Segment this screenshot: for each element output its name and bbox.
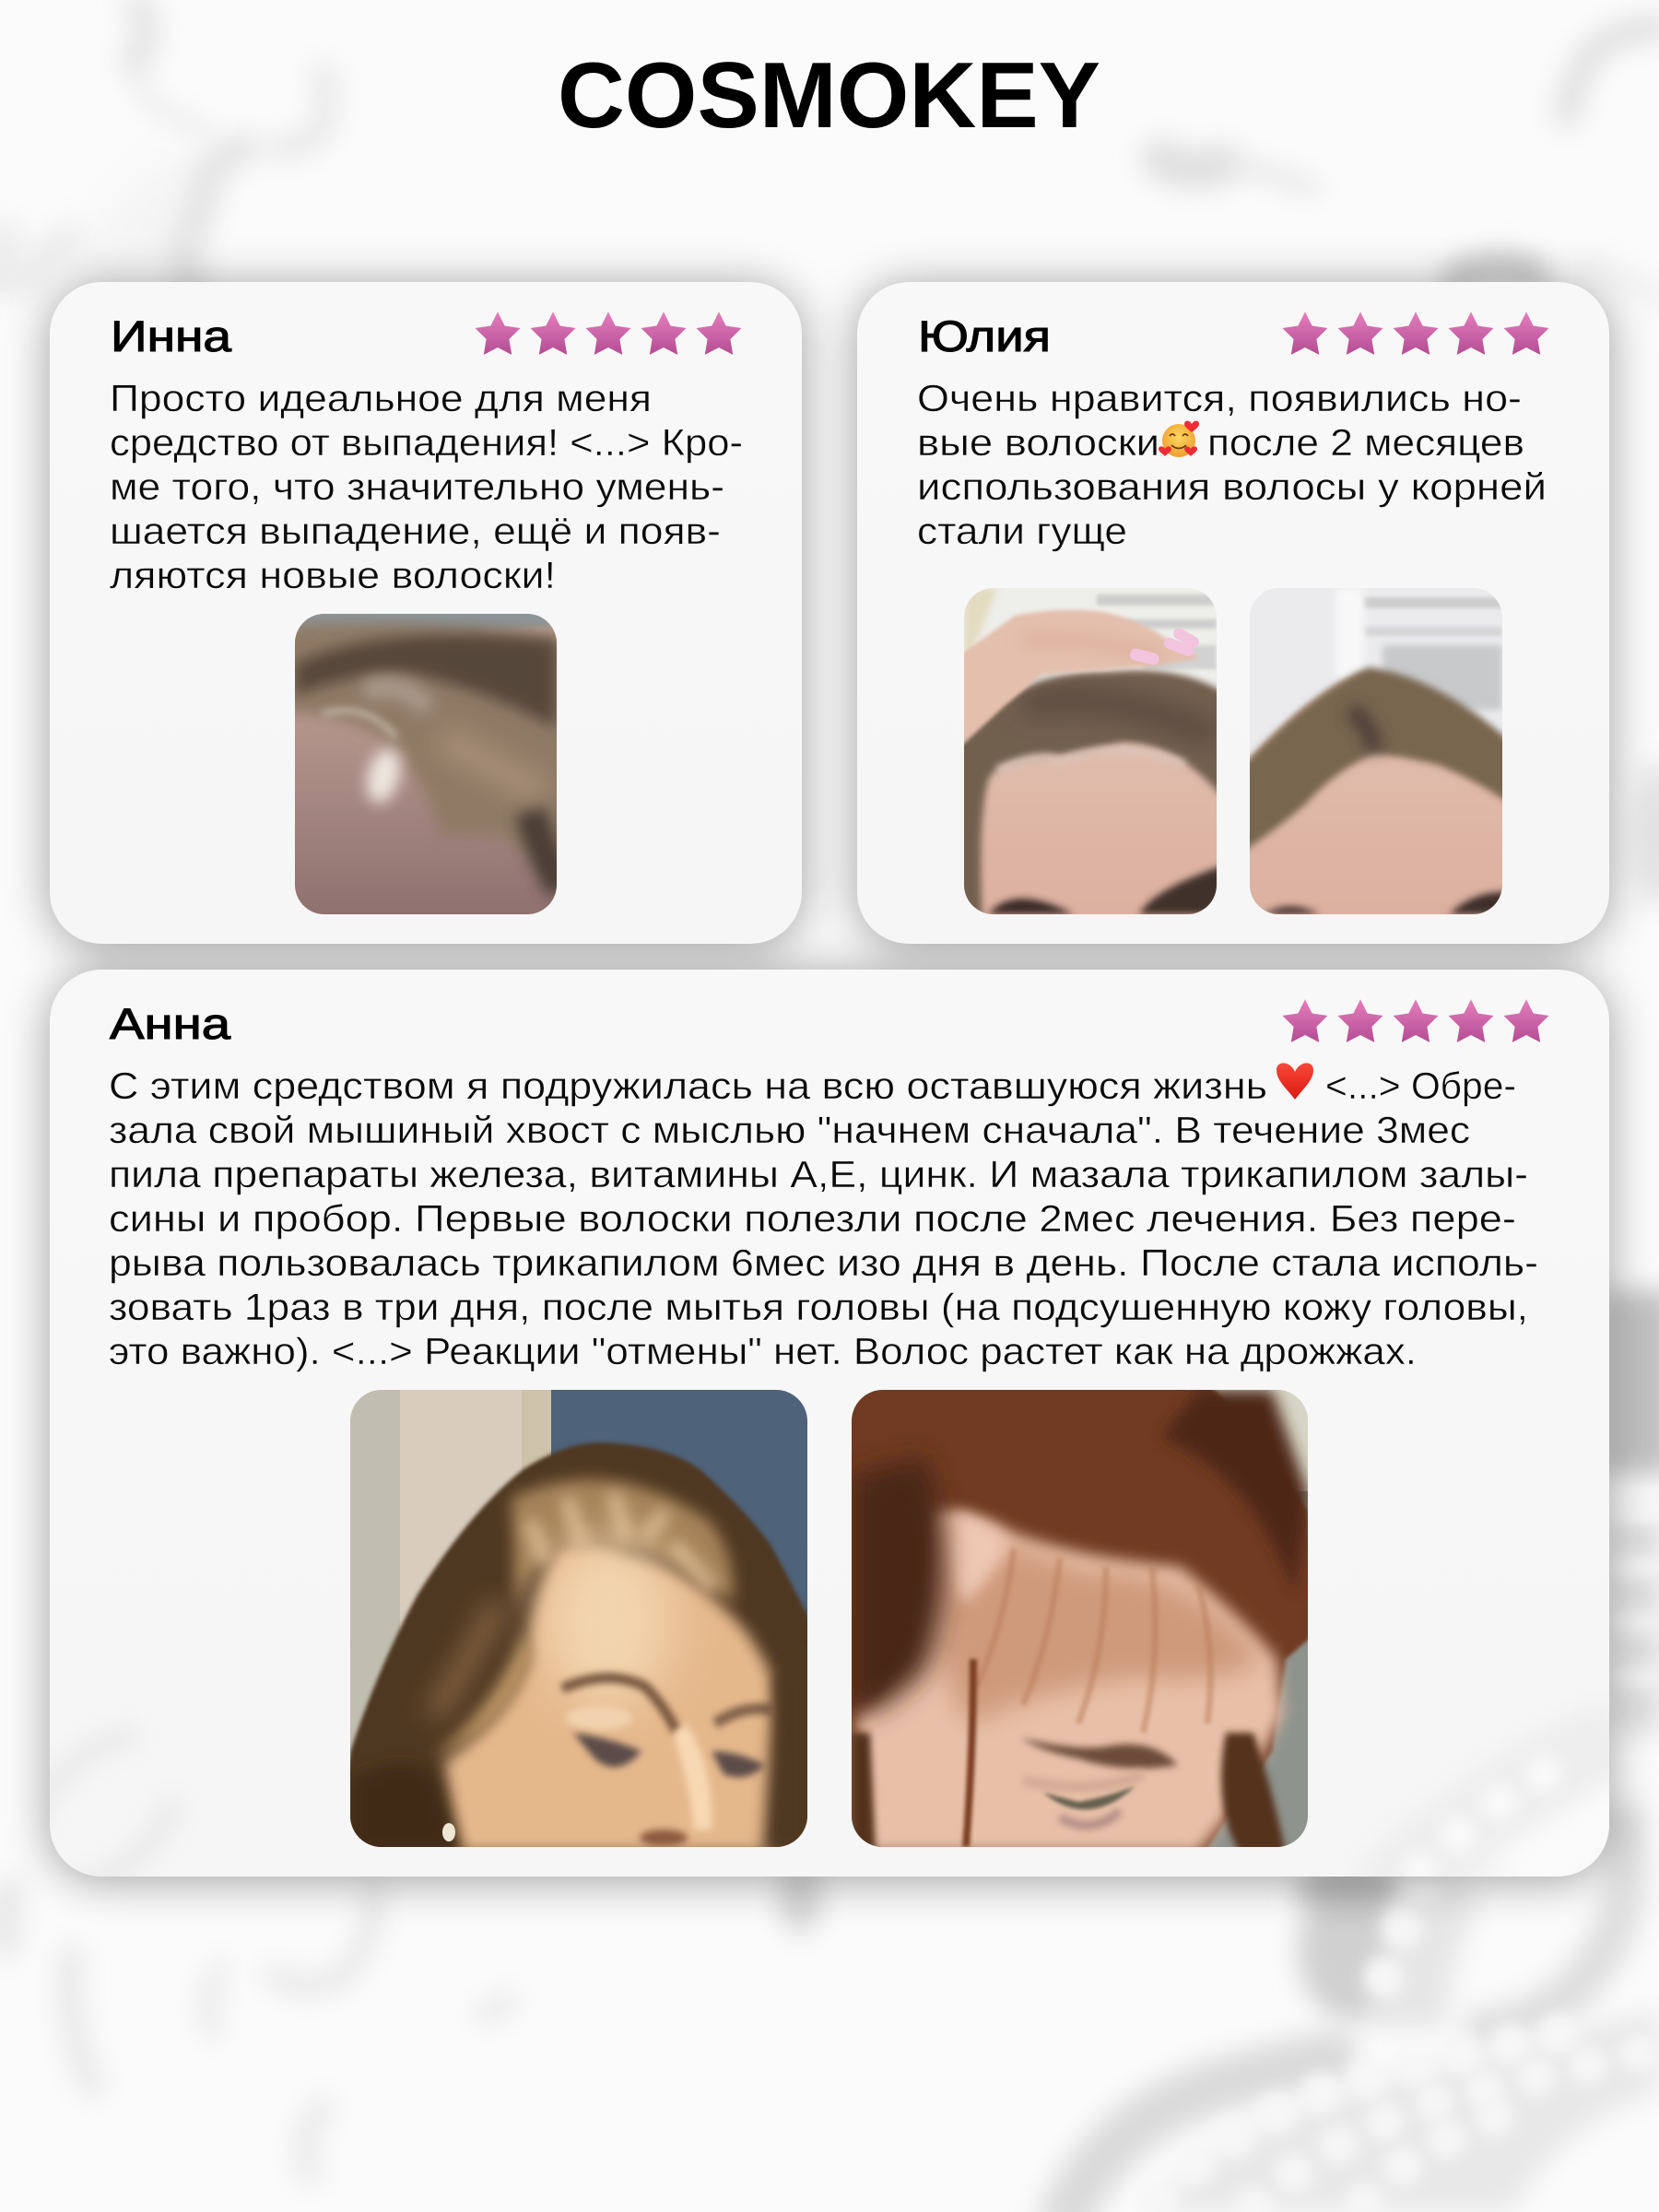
review text: <...> Обре- [1325, 1065, 1516, 1107]
panel: review Inna [50, 282, 802, 944]
bottom-right bead rope [1060, 1806, 1659, 2212]
right edge shading [1597, 760, 1659, 1733]
review text: рыва пользовалась трикапилом 6мес изо дня в день. После стала исполь- [109, 1241, 1538, 1284]
rating stars [476, 312, 741, 355]
review text: С этим средством я подружилась на всю оставшуюся жизнь [109, 1065, 1267, 1107]
title: COSMOKEY [558, 44, 1100, 147]
review text: шается выпадение, ещё и появ- [110, 510, 721, 552]
panel: review Yulia [857, 282, 1609, 944]
review text: вые волоски [917, 421, 1159, 464]
name: Inna: Инна [111, 312, 232, 360]
review text [917, 377, 1547, 552]
top-left blob shading [0, 5, 327, 286]
review text [110, 377, 743, 596]
name: Anna: Анна [110, 999, 231, 1048]
see-through bead rope on card [28, 1733, 1631, 1899]
review text: после 2 месяцев [1207, 421, 1524, 464]
review text: зала свой мышиный хвост с мыслью "начнем сначала". В течение 3мес [109, 1109, 1470, 1151]
review text: сины и пробор. Первые волоски полезли после 2мес лечения. Без пере- [109, 1197, 1516, 1240]
bottom-left strands [5, 1864, 822, 2175]
icon: red heart [1277, 1063, 1313, 1100]
rating stars [1283, 312, 1548, 355]
review text: это важно). <...> Реакции "отмены" нет. Волос растет как на дрожжах. [109, 1330, 1417, 1372]
review text: ляются новые волоски! [110, 554, 556, 596]
review text: зовать 1раз в три дня, после мытья головы (на подсушенную кожу головы, [109, 1286, 1528, 1328]
panel: review Anna [28, 970, 1631, 1899]
review text: Очень нравится, появились но- [917, 377, 1522, 419]
photo: thinning hairline [295, 614, 557, 914]
rating stars [1283, 999, 1548, 1042]
review text: средство от выпадения! <...> Кро- [110, 421, 743, 464]
review text: пила препараты железа, витамины А,Е, цинк. И мазала трикапилом залы- [109, 1153, 1528, 1195]
photo: after, red-brown hair regrowth [839, 1382, 1318, 1862]
review text: стали гуще [917, 510, 1127, 552]
review text: использования волосы у корней [917, 465, 1547, 508]
review text: ме того, что значительно умень- [110, 465, 724, 508]
name: Yulia: Юлия [918, 312, 1051, 360]
card shadows [50, 286, 1609, 1880]
photo: hairline with hand [964, 588, 1217, 914]
photo: before, blonde hair against blue wall [332, 1390, 820, 1862]
review text: Просто идеальное для меня [110, 377, 652, 419]
photo: hairline with parting [1250, 588, 1502, 914]
review text [109, 1065, 1538, 1372]
icon: smiling face with hearts [1159, 421, 1199, 457]
top-right shading [1161, 28, 1659, 300]
